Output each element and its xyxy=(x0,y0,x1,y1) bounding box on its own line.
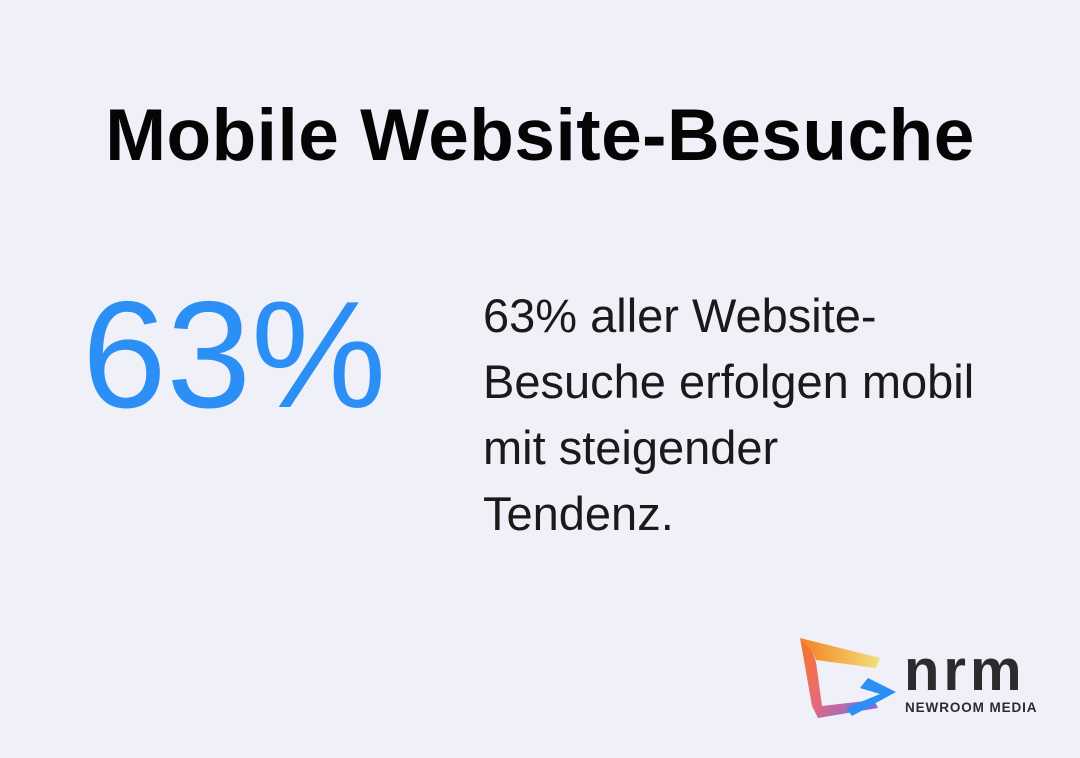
logo: newroom media: nrm xyxy=(904,638,1026,703)
logo: newroom media xyxy=(800,638,1037,718)
logo: newroom media: NEWROOM MEDIA xyxy=(905,700,1037,715)
description text: Besuche erfolgen mobil xyxy=(483,355,974,408)
title: Mobile Website-Besuche xyxy=(105,95,975,176)
description text: mit steigender xyxy=(483,421,778,474)
description text xyxy=(483,289,974,540)
big stat: 63% xyxy=(82,270,386,440)
description text: 63% aller Website- xyxy=(483,289,877,342)
description text: Tendenz. xyxy=(483,487,674,540)
